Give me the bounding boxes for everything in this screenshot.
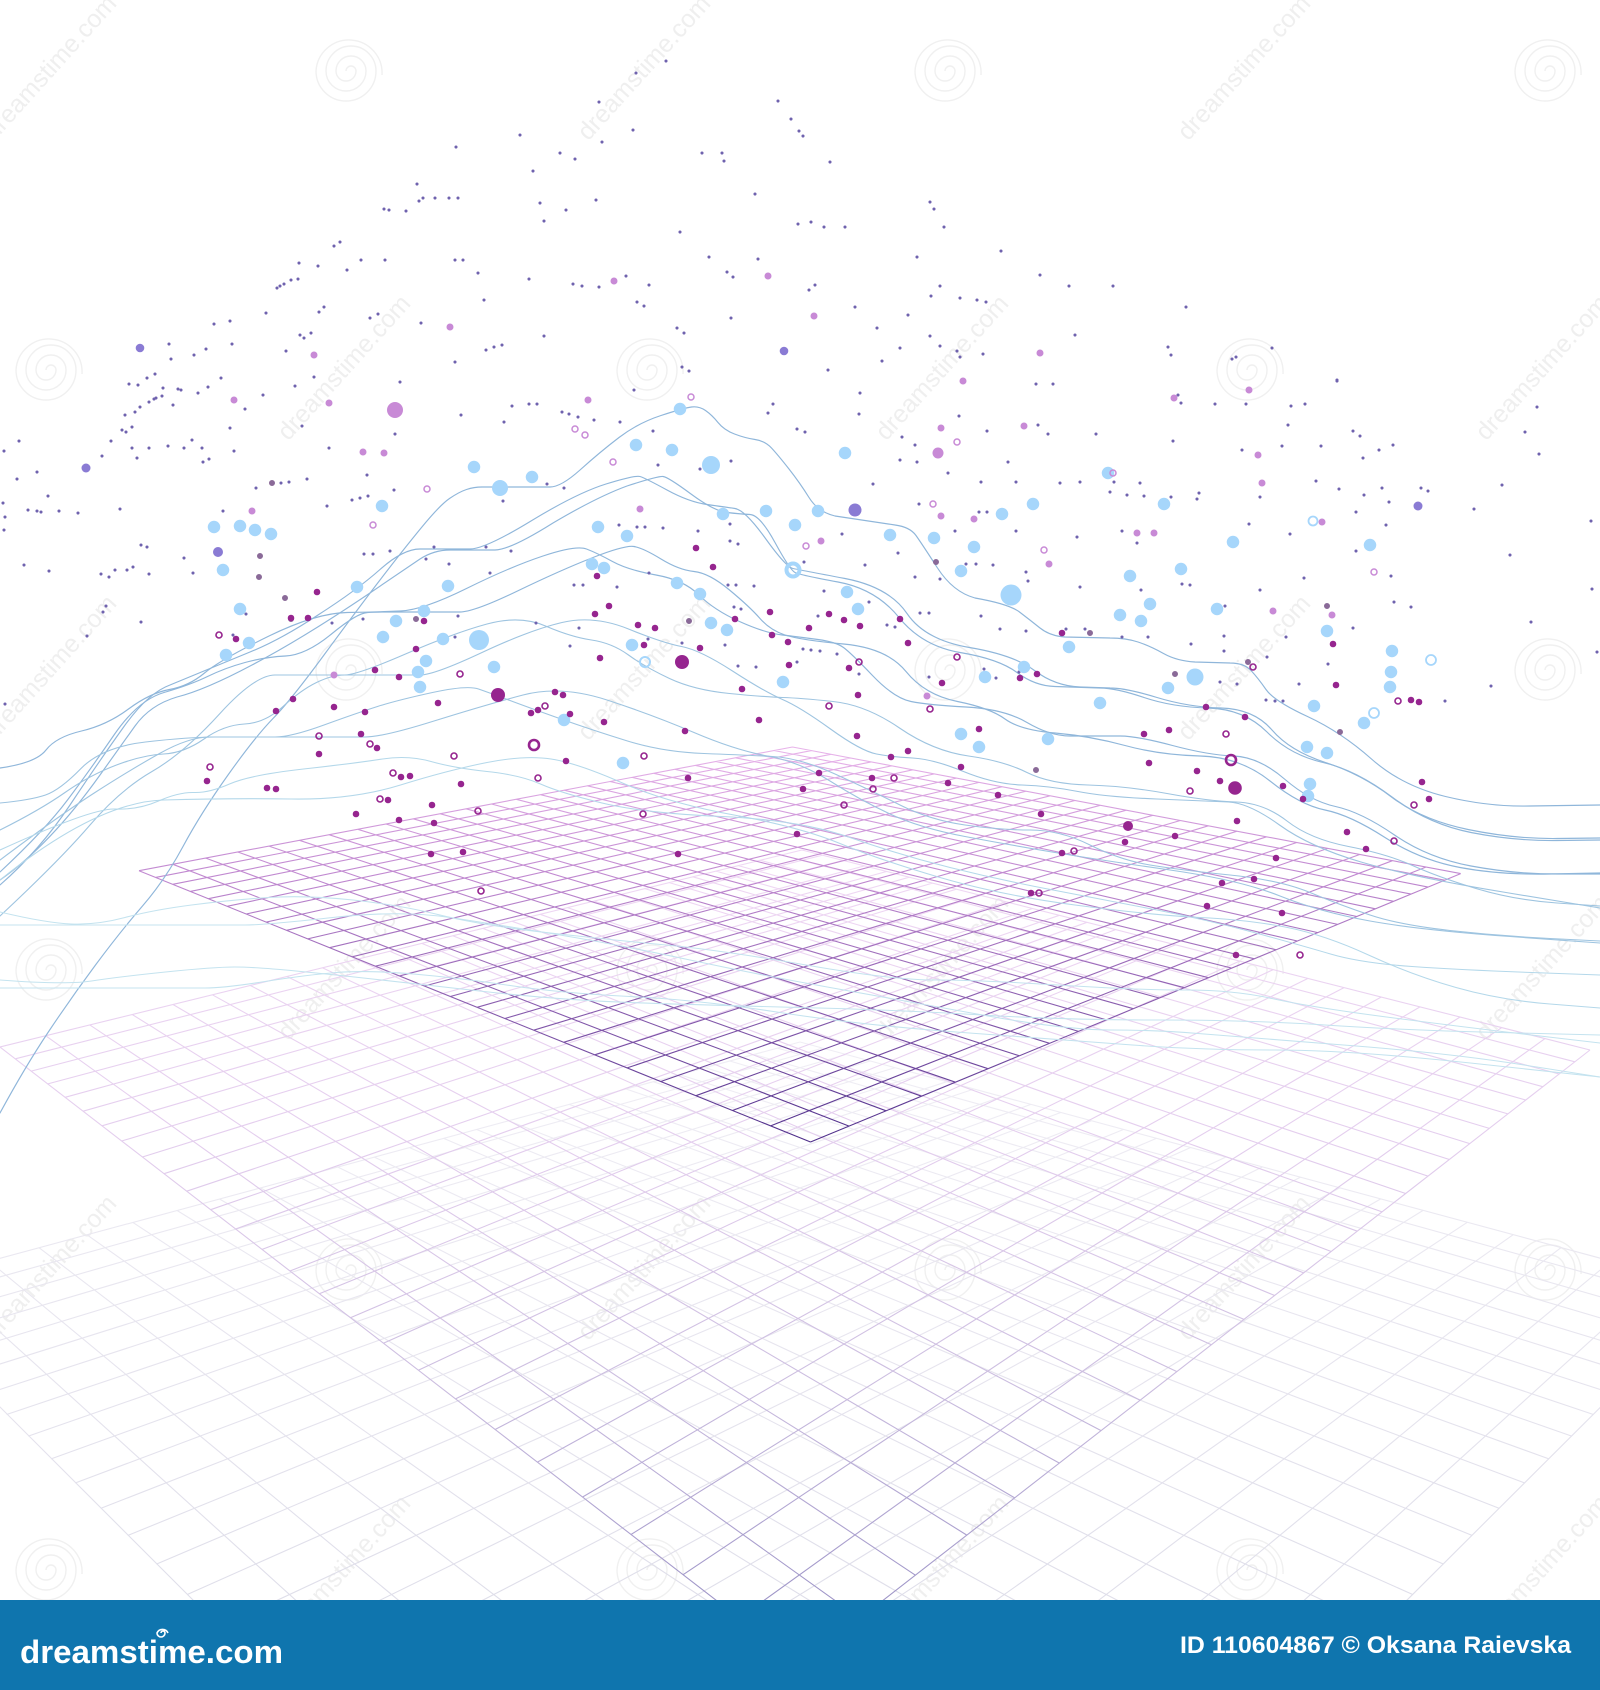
large light blue dots (469, 456, 1204, 686)
watermark text: dreamstime.com (272, 1490, 416, 1646)
light blue rings (640, 516, 1436, 718)
watermark text: dreamstime.com (572, 590, 716, 746)
large magenta rings (529, 740, 1236, 765)
grey purple dots (259, 483, 1340, 770)
watermark text: dreamstime.com (272, 890, 416, 1046)
logo spiral (157, 1629, 168, 1637)
watermark text: dreamstime.com (1172, 1190, 1316, 1346)
periwinkle dots (82, 344, 1422, 557)
image credit: ID 110604867 © Oksana Raievska (1180, 1632, 1572, 1659)
pink dots (234, 276, 1332, 696)
watermark text: dreamstime.com (1172, 590, 1316, 746)
banner text and logo (20, 1628, 1572, 1670)
middle perspective grid (0, 850, 1590, 1665)
large pink dots (387, 402, 944, 458)
magenta rings (207, 632, 1417, 958)
pink rings (370, 394, 1377, 575)
watermark text: dreamstime.com (272, 290, 416, 446)
light blue dots (214, 409, 1392, 796)
outer faint perspective grid (0, 1042, 1600, 1662)
top perspective grid (139, 747, 1461, 1142)
watermark text: dreamstime.com (572, 1190, 716, 1346)
wave lines (0, 407, 1600, 1113)
logo wordmark: dreamstime.com (20, 1634, 283, 1670)
watermark text: dreamstime.com (870, 1490, 1014, 1646)
large magenta dots (491, 655, 1242, 831)
magenta dots (207, 548, 1429, 955)
watermark text: dreamstime.com (870, 890, 1014, 1046)
small scattered dots (3, 61, 1597, 704)
footer banner (0, 1600, 1600, 1690)
watermark text: dreamstime.com (870, 290, 1014, 446)
